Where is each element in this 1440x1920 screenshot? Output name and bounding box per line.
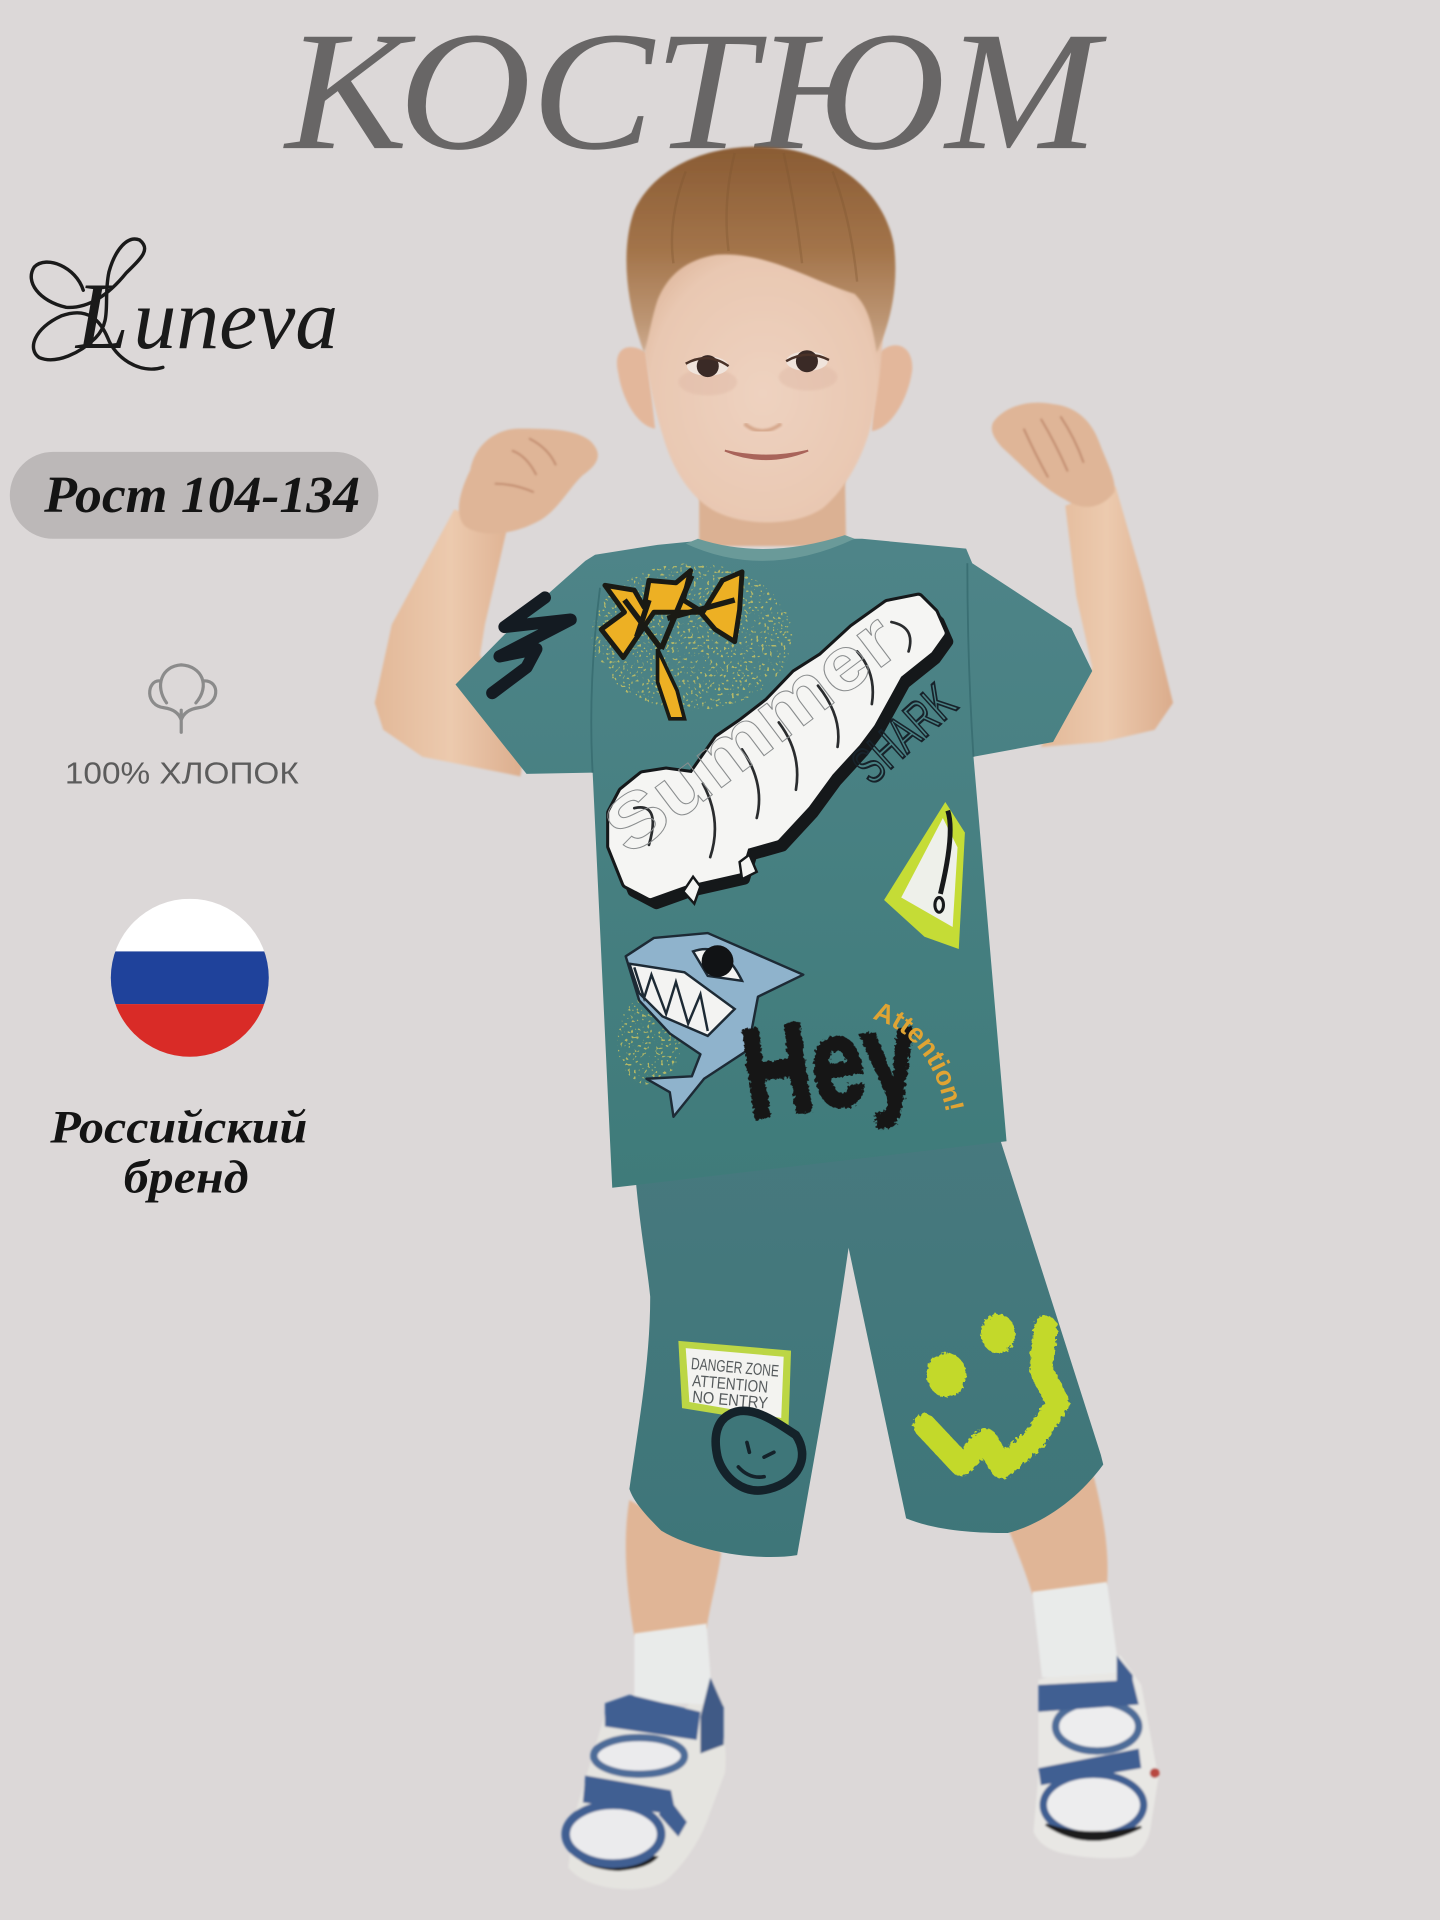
print: Summer graffiti — [588, 596, 948, 904]
icon: Russian flag circle — [110, 899, 269, 1058]
collar — [686, 535, 855, 561]
nose — [744, 424, 781, 431]
logo: Luneva — [31, 239, 338, 369]
print: sleeve squiggle — [492, 598, 571, 693]
print: warning triangle — [884, 802, 965, 949]
print: shark — [617, 933, 803, 1117]
sleeve seams — [591, 563, 973, 773]
label: danger zone patch — [678, 1341, 791, 1425]
print: Attention arc text: Attention! — [872, 1004, 964, 1110]
neck — [699, 471, 846, 546]
left arm — [375, 429, 598, 776]
hair — [626, 147, 895, 353]
right sandal — [1032, 1582, 1160, 1858]
logo: Luneva: uneva — [133, 272, 338, 367]
label: danger zone patch: ATTENTION — [691, 1371, 769, 1397]
icon: cotton boll — [150, 665, 216, 732]
print: Hey graffiti: Hey — [733, 981, 925, 1146]
label: danger zone patch: DANGER ZONE — [690, 1354, 780, 1381]
t-shirt — [456, 535, 1092, 1188]
logo: Luneva: L — [74, 263, 129, 369]
eyes — [678, 350, 838, 396]
right ear — [872, 345, 912, 431]
left sandal — [566, 1624, 726, 1889]
title: КОСТЮМ — [283, 0, 1107, 185]
photo: boy in summer suit — [374, 145, 1174, 1888]
print: spray paint dots — [591, 563, 792, 710]
print: yellow smiley — [924, 1314, 1058, 1467]
right leg — [1007, 1476, 1108, 1594]
label: danger zone patch: NO ENTRY — [691, 1387, 769, 1413]
print: Shark scribble: SHARK — [840, 673, 967, 794]
text: Russian brand: бренд — [124, 1153, 249, 1204]
print: scribble face — [716, 1411, 802, 1490]
text: Russian brand: Российский — [49, 1102, 307, 1153]
print: yellow palm — [601, 571, 742, 719]
print: Summer graffiti: Summer — [588, 596, 913, 871]
face — [642, 236, 884, 522]
left ear — [617, 347, 655, 429]
right fist — [992, 403, 1115, 507]
badge: height range — [10, 452, 378, 539]
left fist — [459, 429, 598, 534]
text: Russian brand — [49, 1102, 307, 1204]
shorts — [629, 1133, 1103, 1557]
badge: height range: Рост 104-134 — [43, 467, 360, 524]
mouth — [725, 451, 808, 459]
right arm — [992, 403, 1173, 747]
left leg — [626, 1500, 721, 1636]
text: 100% cotton: 100% ХЛОПОК — [65, 757, 299, 791]
